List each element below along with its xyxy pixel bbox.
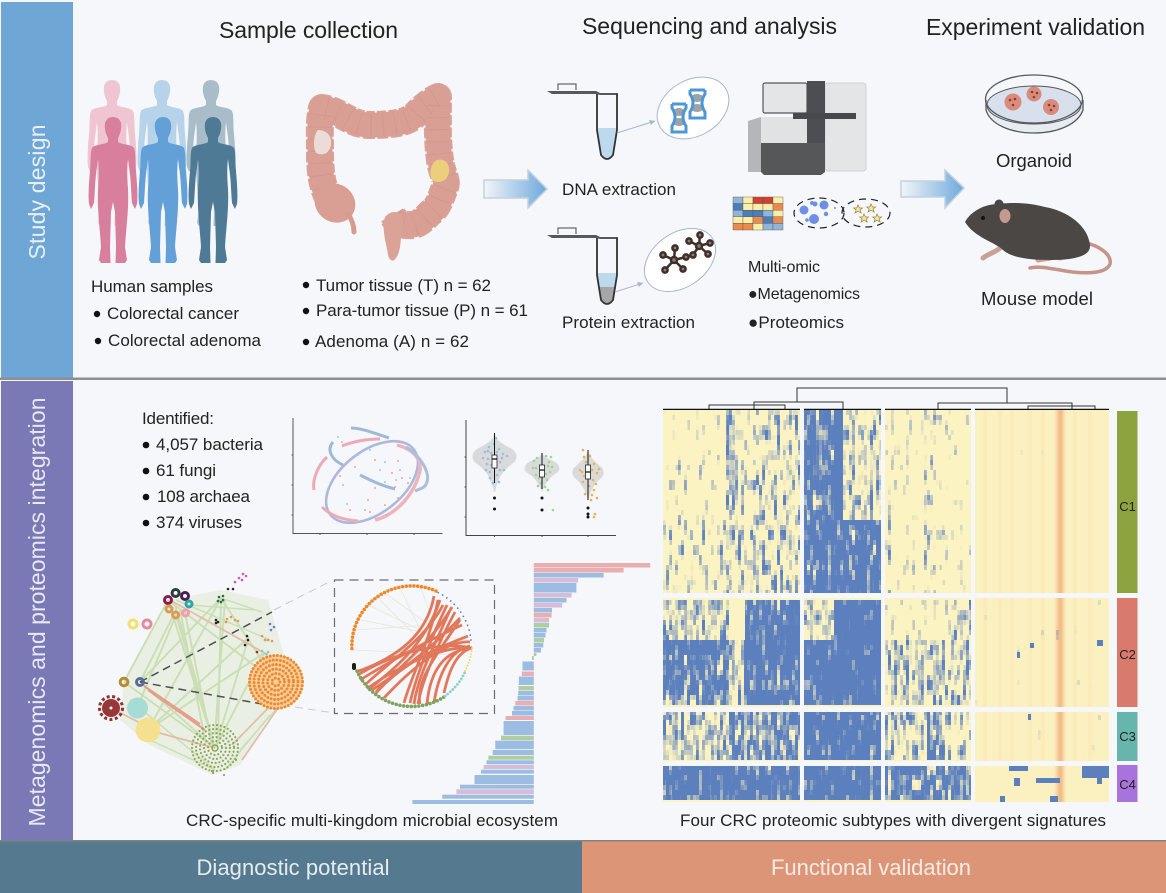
text: identified list: 61 fungi [156, 461, 216, 480]
text: tissue list: Tumor tissue (T) n = 62 [316, 276, 491, 295]
node cluster: yellow [136, 718, 160, 742]
node cluster: teal [127, 698, 148, 718]
legend: subtype sidebar: C1 [1119, 499, 1136, 514]
node cluster: orange [249, 655, 303, 709]
node cluster: red [100, 696, 122, 720]
arrow: to validation [901, 170, 964, 208]
text: tissue list: Adenoma (A) n = 62 [315, 332, 469, 351]
icon: dashed molecule clusters [794, 198, 890, 228]
solid blue patches [1000, 640, 1109, 802]
caption: multi-kingdom ecosystem: CRC-specific multi-kingdom microbial ecosystem [186, 811, 558, 830]
node cluster: green [192, 725, 238, 775]
panel: study design [0, 0, 1166, 380]
caption: proteomic subtypes: Four CRC proteomic subtypes with divergent signatures [680, 811, 1106, 830]
text: organoid: Organoid [996, 150, 1072, 171]
legend: subtype sidebar: C3 [1119, 729, 1136, 744]
chart: violin plots [464, 420, 616, 537]
text: human samples: Human samples [91, 277, 213, 296]
arrow: to sequencing [484, 170, 547, 208]
icon: mouse [965, 200, 1110, 273]
text: identified list: 374 viruses [156, 513, 242, 532]
heading: sample collection: Sample collection [219, 17, 398, 43]
icon: mini heatmap [733, 197, 783, 230]
text: DNA extraction: DNA extraction [562, 180, 676, 199]
panel: metagenomics and proteomics integration [1, 381, 1138, 840]
text: human samples [91, 277, 262, 350]
label: study design: Study design [24, 124, 50, 260]
text: multi-omic list: ●Metagenomics [748, 286, 860, 303]
text: identified list: Identified: [142, 409, 214, 428]
text: identified list: 108 archaea [157, 487, 251, 506]
icon: DNA extraction tube [547, 65, 740, 159]
icon: protein extraction tube [547, 216, 727, 304]
small node rings [120, 590, 192, 686]
icon: human figures [88, 80, 237, 263]
orange stripe [1054, 410, 1066, 802]
chart: zoomed chord diagram [334, 580, 494, 714]
label: integration: Metagenomics and proteomics integration [24, 398, 50, 826]
text: human samples: Colorectal adenoma [108, 331, 262, 350]
banner: functional validation [582, 842, 1166, 893]
chord ribbons [356, 596, 472, 704]
text: human samples: Colorectal cancer [107, 304, 239, 323]
dendrogram [709, 388, 1095, 409]
heading: sequencing and analysis: Sequencing and analysis [582, 13, 837, 39]
legend: subtype sidebar: C4 [1119, 777, 1136, 792]
text: multi-omic list: ●Proteomics [748, 313, 844, 332]
text: identified list [142, 409, 264, 532]
text: multi-omic list: Multi-omic [748, 259, 820, 276]
banner: diagnostic potential [0, 840, 1166, 893]
text: multi-omic list [748, 259, 860, 332]
text: tissue list [303, 276, 528, 351]
text: tissue list: Para-tumor tissue (P) n = 61 [316, 301, 528, 320]
icon: colon [307, 97, 449, 261]
chart: microbial co-occurrence network [100, 574, 334, 775]
icon: organoid dish [986, 75, 1083, 133]
text: protein extraction: Protein extraction [562, 313, 695, 332]
text: identified list: 4,057 bacteria [156, 435, 264, 454]
chart: ordination scatter [292, 418, 442, 539]
icon: sequencer [748, 81, 866, 175]
legend: subtype sidebar [1117, 411, 1138, 802]
banner: diagnostic potential: Diagnostic potential [196, 855, 390, 880]
small node dots [216, 574, 274, 654]
blue noise blocks [663, 410, 1109, 802]
chart: diverging bar chart [412, 563, 650, 804]
faint column stripes [985, 410, 1090, 761]
chord node ring [352, 586, 472, 706]
heading: experiment validation: Experiment validation [926, 14, 1145, 40]
text: mouse model: Mouse model [981, 288, 1093, 309]
legend: subtype sidebar: C2 [1119, 647, 1136, 662]
banner: functional validation: Functional validation [771, 855, 971, 880]
heatmap base [663, 410, 971, 802]
chart: proteomic heatmap [663, 388, 1109, 802]
